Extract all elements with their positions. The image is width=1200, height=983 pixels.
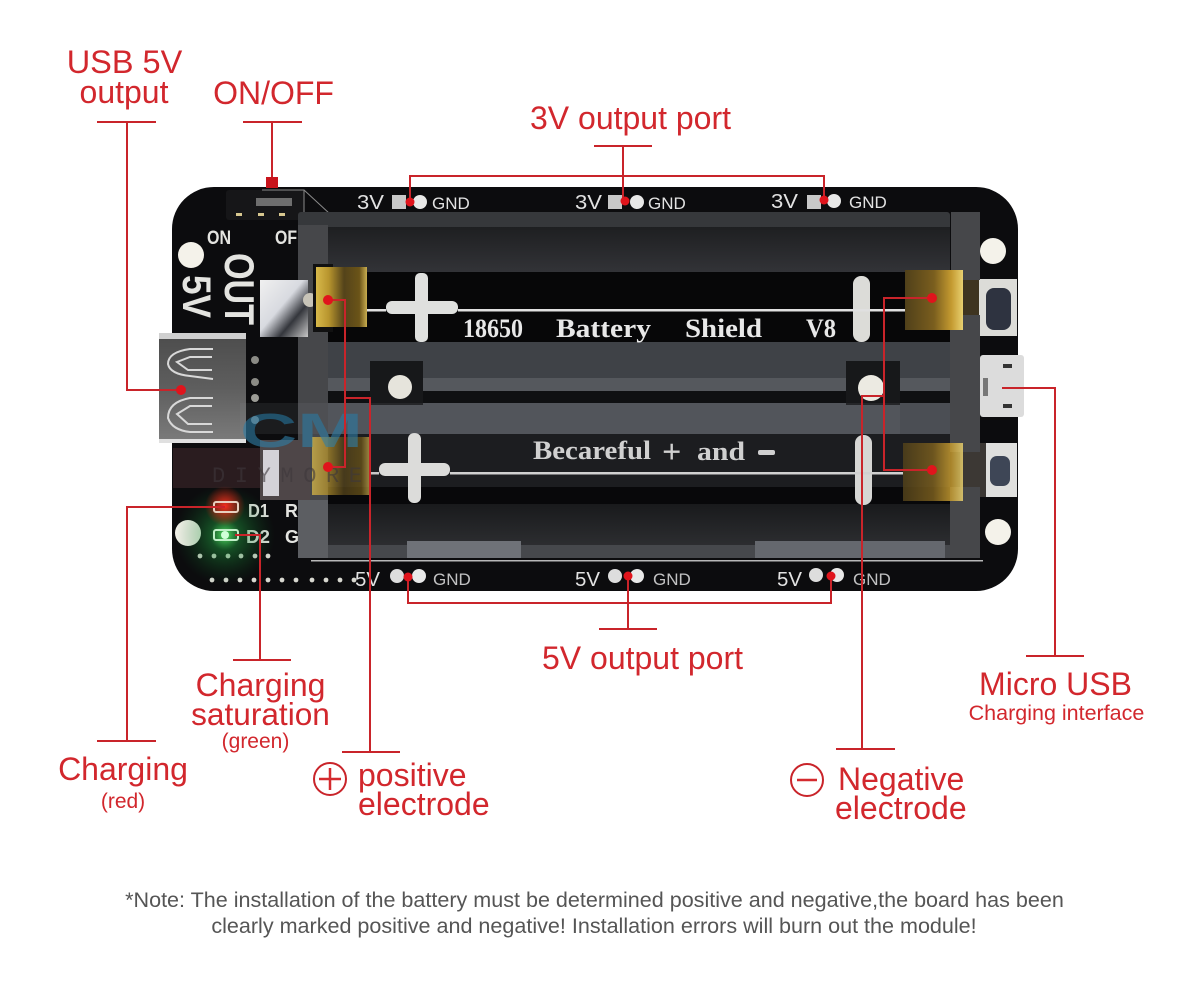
label: USB 5V output	[67, 44, 186, 395]
note: clearly marked positive and negative! Installation errors will burn out the module!	[211, 913, 977, 938]
board silkscreen left: OUT	[216, 253, 263, 325]
power switch	[226, 190, 330, 220]
5V and GND pads bottom: GND	[653, 570, 691, 589]
label: positive electrode	[314, 295, 490, 822]
center posts	[370, 361, 423, 405]
board silkscreen left	[174, 228, 299, 547]
3V and GND pads top: GND	[849, 193, 887, 212]
battery terminals left	[260, 280, 317, 500]
5V and GND pads bottom: 5V	[575, 569, 601, 591]
label: Negative electrode	[791, 293, 967, 826]
battery holder	[298, 212, 980, 558]
board text: 18650 Battery Shield V8: Battery	[556, 314, 651, 343]
board text: Becareful + and -	[533, 434, 775, 471]
watermark: DIYMORE	[212, 464, 362, 489]
board text: 18650 Battery Shield V8: 18650	[463, 314, 523, 343]
label: ON/OFF	[213, 75, 334, 188]
board silkscreen left: OF	[275, 228, 297, 249]
printed polarity marks and traces	[367, 273, 905, 505]
reddish tint on board corner	[173, 448, 303, 488]
USB-A output port	[159, 333, 259, 443]
label: Micro USB charging interface: Charging interface	[969, 701, 1144, 725]
mounting holes	[175, 238, 1011, 546]
board text: 18650 Battery Shield V8: V8	[806, 314, 836, 343]
micro USB port	[980, 355, 1024, 417]
5V and GND pads bottom: 5V	[777, 569, 803, 591]
battery terminals right	[960, 279, 1017, 497]
note	[125, 887, 1064, 938]
3V and GND pads top	[357, 191, 887, 214]
3V and GND pads top: 3V	[357, 192, 385, 214]
board silkscreen left: D1	[248, 501, 269, 521]
watermark: CM	[240, 405, 363, 458]
label: Charging (red): Charging	[58, 751, 188, 787]
circuit board	[172, 187, 1018, 591]
board text: 18650 Battery Shield V8	[463, 314, 836, 343]
gold battery clips	[312, 264, 963, 501]
label: positive electrode: electrode	[358, 786, 490, 822]
5V and GND pads bottom	[355, 568, 891, 591]
board text: Becareful + and -: +	[662, 434, 681, 471]
5V and GND pads bottom: GND	[853, 570, 891, 589]
label: 5V output port: 5V output port	[542, 640, 743, 676]
label: Negative electrode: electrode	[835, 790, 967, 826]
label: USB 5V output: output	[80, 74, 169, 110]
label: USB 5V output: USB 5V	[67, 44, 183, 80]
label: Negative electrode: Negative	[838, 761, 964, 797]
board text: 18650 Battery Shield V8: Shield	[685, 314, 763, 343]
board silkscreen left: ON	[207, 228, 231, 249]
label: Micro USB charging interface	[969, 388, 1144, 725]
label: 5V output port	[404, 572, 836, 676]
label: Charging saturation (green)	[191, 535, 330, 753]
board text: Becareful + and -: and	[697, 437, 746, 466]
board silkscreen left: G	[285, 527, 299, 547]
5V and GND pads bottom: 5V	[355, 569, 381, 591]
board text: Becareful + and -: Becareful	[533, 436, 651, 465]
label: Charging saturation (green): (green)	[222, 730, 289, 753]
label: Charging saturation (green): Charging	[196, 667, 325, 703]
board silkscreen left: R	[285, 501, 298, 521]
label: Charging (red)	[58, 507, 225, 813]
3V and GND pads top: GND	[648, 194, 686, 213]
watermark	[212, 403, 900, 489]
label: 3V output port: 3V output port	[530, 100, 731, 136]
via dots	[198, 554, 356, 582]
label: Charging (red): (red)	[101, 790, 145, 813]
board silkscreen left: 5V	[174, 275, 218, 318]
board silkscreen left: D2	[246, 527, 270, 547]
label: Charging saturation (green): saturation	[191, 696, 330, 732]
label: ON/OFF: ON/OFF	[213, 75, 334, 111]
label: Micro USB charging interface: Micro USB	[979, 666, 1132, 702]
3V and GND pads top: 3V	[575, 192, 603, 214]
3V and GND pads top: 3V	[771, 191, 799, 213]
note: *Note: The installation of the battery must be determined positive and negative,the board has been	[125, 887, 1064, 912]
status LEDs	[175, 485, 275, 585]
label: 3V output port	[406, 100, 828, 206]
3V and GND pads top: GND	[432, 194, 470, 213]
5V and GND pads bottom: GND	[433, 570, 471, 589]
label: positive electrode: positive	[358, 757, 466, 793]
